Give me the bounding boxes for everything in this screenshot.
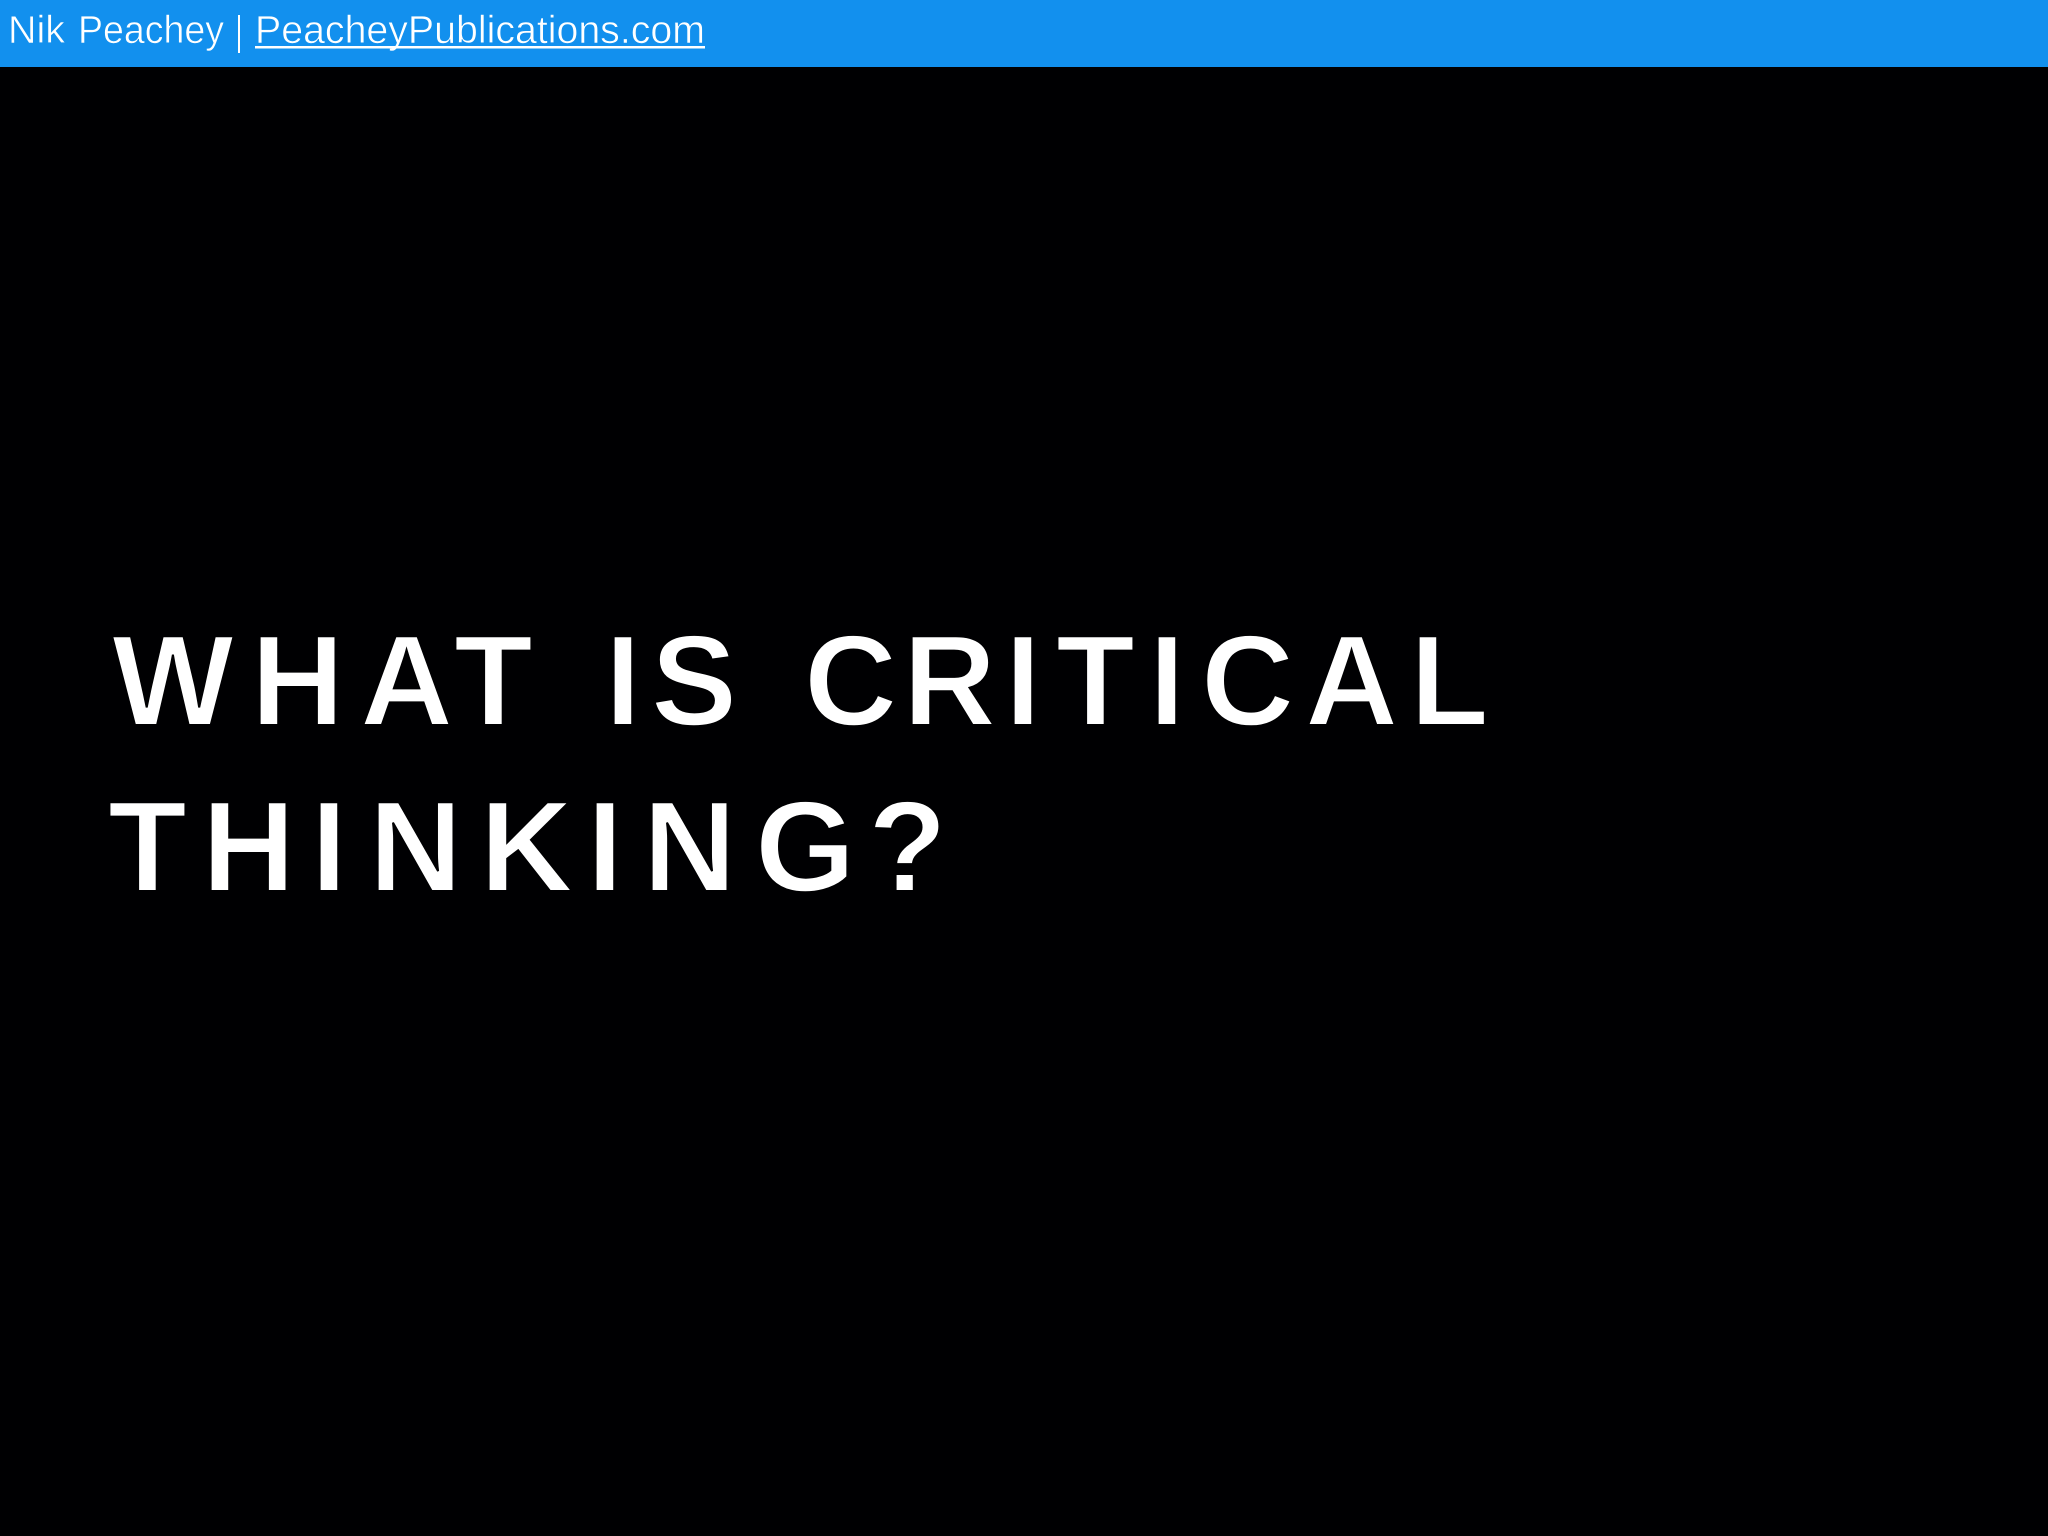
attribution: website link: PeacheyPublications.com: [255, 9, 705, 52]
title: WHAT IS CRITICAL: [112, 609, 1489, 753]
title: [108, 609, 1489, 919]
attribution: author name: Nik: [8, 9, 66, 52]
title: THINKING?: [108, 775, 947, 919]
attribution: author name: [8, 9, 240, 53]
attribution: author name: Peachey: [78, 9, 225, 52]
header bar with attribution: [0, 0, 2048, 67]
